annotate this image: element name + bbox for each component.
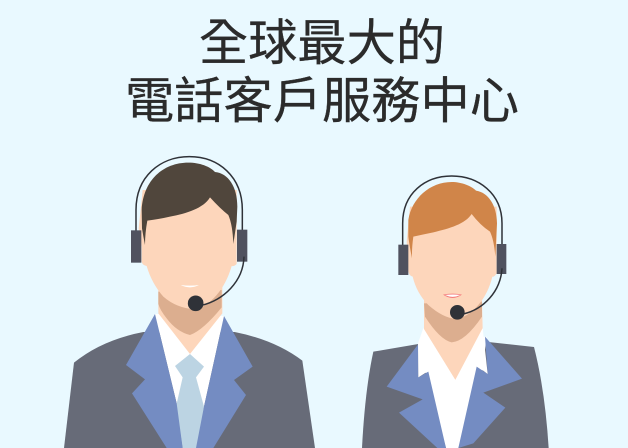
title: 全球最大的	[199, 16, 445, 71]
male jacket	[64, 332, 315, 448]
male face	[139, 190, 237, 309]
male microphone	[188, 295, 203, 311]
title: 電話客戶服務中心	[125, 74, 519, 129]
male neck	[158, 287, 222, 354]
title	[125, 16, 519, 129]
female neck	[424, 300, 483, 380]
male hair	[142, 163, 237, 245]
female lips highlight	[445, 294, 460, 297]
female shirt	[418, 337, 487, 448]
female hair	[408, 182, 497, 258]
male ear cups	[131, 230, 247, 263]
female lips	[443, 294, 462, 298]
female right lapel	[458, 337, 522, 448]
female microphone boom	[463, 268, 502, 314]
male call center agent	[64, 157, 315, 448]
female face	[407, 207, 497, 319]
female collar	[418, 328, 488, 380]
female headband	[403, 176, 502, 245]
female ear cups	[398, 244, 506, 275]
male headband	[136, 157, 242, 231]
male microphone boom	[202, 257, 244, 305]
male smile	[181, 285, 199, 287]
female neck shadow	[424, 302, 482, 342]
female microphone	[450, 305, 465, 320]
male tie	[175, 354, 204, 448]
male left lapel	[126, 314, 183, 448]
female call center agent	[362, 176, 549, 448]
male right lapel	[196, 316, 253, 448]
female left lapel	[387, 344, 446, 448]
male shirt	[155, 314, 224, 448]
female jacket	[362, 342, 549, 448]
male neck shadow	[158, 290, 222, 335]
